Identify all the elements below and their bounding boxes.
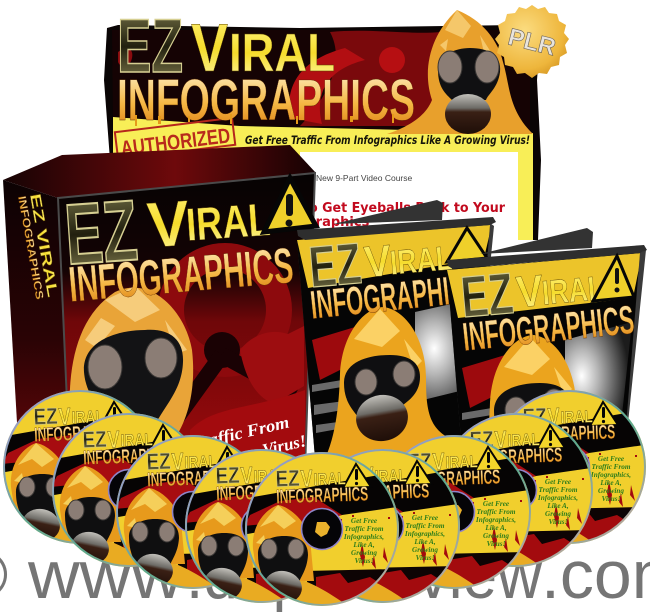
disc 8 right: Like A, bbox=[546, 502, 569, 510]
case body bbox=[297, 223, 494, 470]
disc 9 back right bbox=[489, 390, 650, 547]
cover art bbox=[297, 225, 490, 457]
disc 6 right: Growing bbox=[412, 546, 438, 554]
watermark behind discs bbox=[0, 537, 650, 612]
disc 5 front bbox=[242, 452, 404, 609]
disc 6 right: Virus! bbox=[416, 554, 435, 562]
disc 7 right: INFOGRAPHICS bbox=[408, 466, 501, 492]
box tagline bbox=[212, 420, 304, 452]
disc 3 left: V bbox=[171, 448, 184, 476]
disc 4 left: EZ bbox=[215, 462, 240, 489]
disc 9 back right: Traffic From bbox=[592, 463, 631, 471]
disc 7 right: Traffic From bbox=[477, 508, 516, 516]
disc 8 right: IRAL bbox=[507, 430, 540, 450]
disc 8 right: Infographics, bbox=[537, 494, 578, 502]
disc set bbox=[0, 390, 650, 609]
disc 8 right: INFOGRAPHICS bbox=[470, 444, 563, 470]
DVD case left bbox=[297, 200, 496, 457]
red banner art bbox=[112, 30, 530, 133]
disc 2 left: INFOGRAPHICS bbox=[83, 444, 176, 470]
case logo: EZ bbox=[306, 231, 364, 300]
hazmat figure bbox=[489, 335, 575, 418]
software box bbox=[3, 145, 316, 475]
box tagline: Traffic From bbox=[189, 413, 291, 454]
disc 3 left: EZ bbox=[146, 448, 171, 475]
disc 8 right: Get Free bbox=[545, 478, 572, 486]
tagline: Get Free Traffic From Infographics Like A Growing Virus! bbox=[245, 133, 530, 147]
box logo: INFOGRAPHICS bbox=[66, 237, 295, 313]
disc 6 right: INFOGRAPHICS bbox=[337, 480, 430, 506]
course line: New 9-Part Video Course bbox=[316, 173, 412, 183]
disc 3 left bbox=[113, 435, 275, 592]
disc 5 front: EZ bbox=[275, 465, 300, 492]
disc 8 right bbox=[436, 413, 598, 570]
white page content bbox=[300, 152, 518, 240]
case logo: INFOGRAPHICS bbox=[308, 266, 482, 328]
disc 3 left: IRAL bbox=[184, 452, 217, 472]
disc 5 front: V bbox=[300, 465, 313, 493]
watermark behind discs: www bbox=[27, 537, 184, 612]
disc 7 right: V bbox=[432, 448, 445, 476]
case body bbox=[447, 250, 646, 500]
disc 9 back right: Virus! bbox=[602, 495, 621, 503]
disc 5 front: Get Free bbox=[351, 517, 378, 525]
disc 5 front: Virus! bbox=[355, 557, 374, 565]
banner hazmat figure bbox=[387, 10, 533, 134]
disc 7 right: Infographics, bbox=[475, 516, 516, 524]
disc 2 left: IRAL bbox=[120, 430, 153, 450]
disc 9 back right: Like A, bbox=[599, 479, 622, 487]
box side face with spine title: INFOGRAPHICS bbox=[15, 195, 45, 300]
DVD case right bbox=[447, 228, 647, 432]
box top face bbox=[3, 145, 316, 198]
red page heading: to Get Eyeballs Back to Your bbox=[303, 201, 506, 216]
disc 6 right bbox=[303, 449, 465, 606]
case logo: EZ bbox=[458, 261, 516, 330]
banner: sales page header bbox=[104, 4, 569, 240]
yellow page background bbox=[113, 117, 533, 240]
disc 8 right: V bbox=[494, 426, 507, 454]
disc 2 left bbox=[49, 413, 211, 570]
case logo: V bbox=[362, 236, 394, 287]
disc 7 right: Virus! bbox=[487, 540, 506, 548]
case logo bbox=[458, 256, 636, 360]
biohazard mark bbox=[171, 256, 295, 420]
disc 4 left: IRAL bbox=[253, 466, 286, 486]
box tagline: Virus! bbox=[261, 431, 308, 460]
disc 8 right: Growing bbox=[545, 510, 571, 518]
disc 6 right: EZ bbox=[336, 462, 361, 489]
banner logo: V bbox=[191, 10, 228, 86]
cover art bbox=[447, 253, 640, 436]
banner logo: INFOGRAPHICS bbox=[117, 68, 415, 133]
banner logo: EZ bbox=[117, 4, 183, 89]
red page heading second line: Graphics bbox=[305, 215, 370, 230]
disc 1 back left: V bbox=[58, 403, 71, 431]
case logo bbox=[306, 228, 487, 328]
authorized stamp: AUTHORIZED bbox=[120, 124, 232, 161]
case logo: IRAL bbox=[389, 239, 454, 283]
disc 2 left: V bbox=[107, 426, 120, 454]
disc 9 back right: EZ bbox=[522, 403, 547, 430]
PLR gold seal: PLR bbox=[505, 24, 558, 61]
disc 2 left: EZ bbox=[82, 426, 107, 453]
disc 1 back left bbox=[0, 390, 162, 547]
back cover edge bbox=[333, 200, 443, 224]
disc 3 left: INFOGRAPHICS bbox=[147, 466, 240, 492]
disc 5 front: Like A, bbox=[352, 541, 375, 549]
disc 9 back right: Growing bbox=[598, 487, 624, 495]
disc 1 back left: INFOGRAPHICS bbox=[34, 421, 127, 447]
disc 9 back right: Get Free bbox=[598, 455, 625, 463]
disc 7 right: EZ bbox=[407, 448, 432, 475]
disc 6 right: V bbox=[361, 462, 374, 490]
box logo: EZ bbox=[62, 183, 140, 283]
disc 5 front: IRAL bbox=[313, 469, 346, 489]
back cover edge bbox=[480, 228, 593, 254]
disc 7 right: Get Free bbox=[483, 500, 510, 508]
box logo bbox=[62, 178, 316, 313]
spine top band bbox=[297, 217, 496, 240]
disc 7 right: IRAL bbox=[445, 452, 478, 472]
box logo: V bbox=[145, 187, 192, 262]
disc 8 right: EZ bbox=[469, 426, 494, 453]
disc 6 right: Get Free bbox=[412, 514, 439, 522]
disc 4 left: INFOGRAPHICS bbox=[216, 480, 309, 506]
disc 5 front: Infographics, bbox=[343, 533, 384, 541]
disc 7 right: Like A, bbox=[484, 524, 507, 532]
box side face with spine title: EZ VIRAL bbox=[26, 192, 61, 299]
spine top band bbox=[447, 245, 647, 269]
disc 9 back right: Infographics, bbox=[590, 471, 631, 479]
disc 8 right: Virus! bbox=[549, 518, 568, 526]
case logo: V bbox=[514, 266, 546, 317]
disc 1 back left: EZ bbox=[33, 403, 58, 430]
disc 1 back left: IRAL bbox=[71, 407, 104, 427]
hazmat figure bbox=[70, 286, 193, 445]
disc 9 back right: V bbox=[547, 403, 560, 431]
disc 5 front: Growing bbox=[351, 549, 377, 557]
box front face bbox=[58, 173, 316, 475]
box logo: IRAL bbox=[184, 193, 272, 251]
box side face with spine title bbox=[3, 180, 72, 470]
disc 4 left: V bbox=[240, 462, 253, 490]
watermark behind discs: .dope-review bbox=[186, 537, 543, 612]
respirator filter bbox=[352, 391, 412, 445]
disc 9 back right: IRAL bbox=[560, 407, 593, 427]
black rough frame bbox=[104, 25, 541, 240]
disc 4 left bbox=[182, 449, 344, 606]
PLR gold seal bbox=[495, 5, 569, 78]
disc 8 right: Traffic From bbox=[539, 486, 578, 494]
disc 7 right: Growing bbox=[483, 532, 509, 540]
disc 5 front: Traffic From bbox=[345, 525, 384, 533]
disc 6 right: Like A, bbox=[413, 538, 436, 546]
banner logo bbox=[117, 4, 415, 133]
disc 6 right: Traffic From bbox=[406, 522, 445, 530]
disc 6 right: Infographics, bbox=[404, 530, 445, 538]
disc 6 right: IRAL bbox=[374, 466, 407, 486]
hazmat figure bbox=[328, 307, 445, 457]
banner logo: IRAL bbox=[229, 23, 335, 83]
disc 7 right bbox=[374, 435, 536, 592]
disc 5 front: INFOGRAPHICS bbox=[276, 483, 369, 509]
case logo: IRAL bbox=[541, 269, 606, 313]
